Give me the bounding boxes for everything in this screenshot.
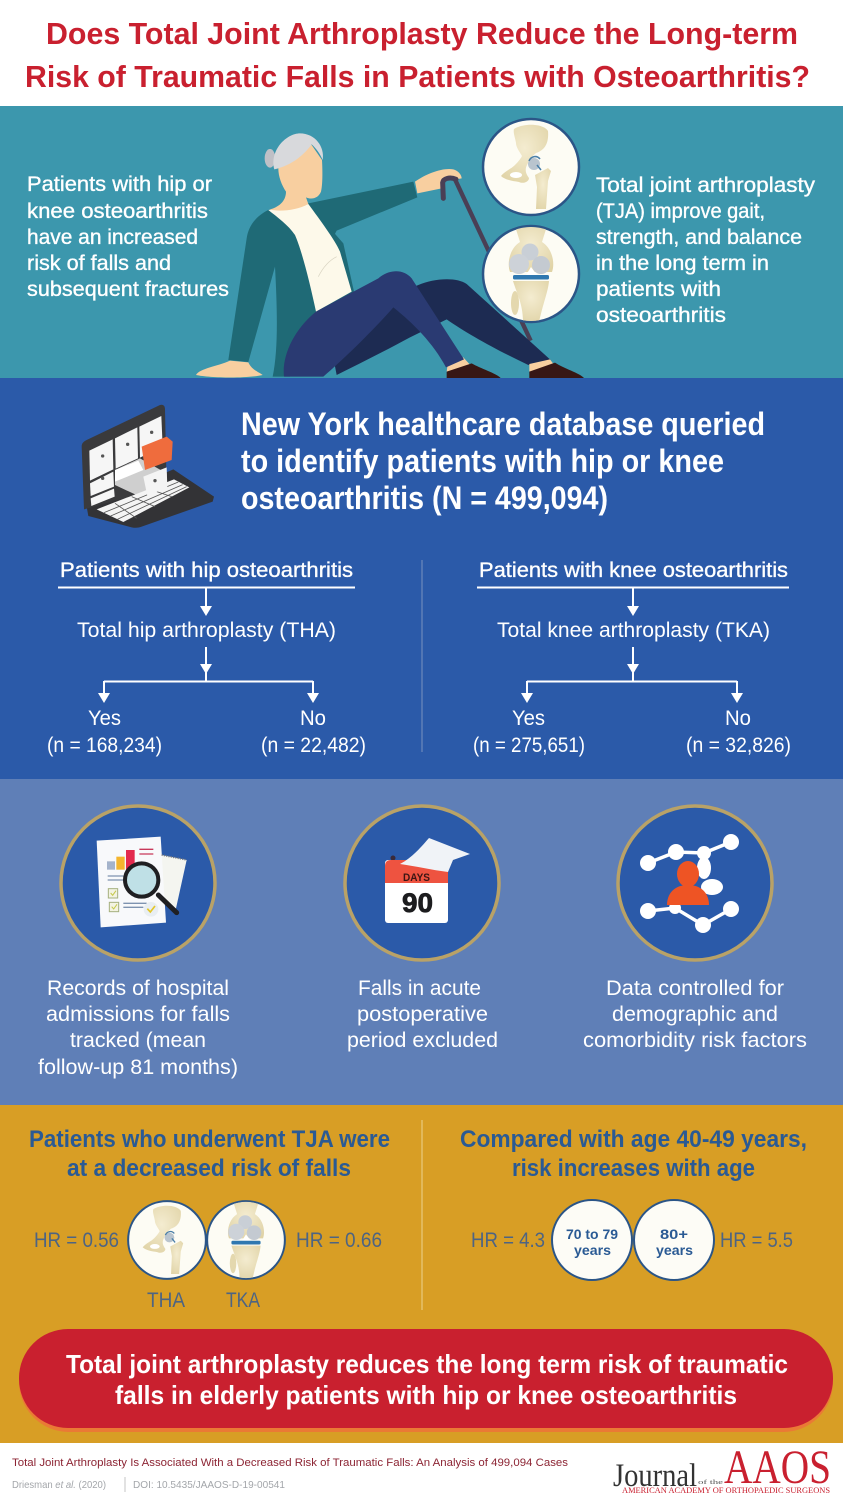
flowchart: hip osteoarthritis: Patients with hip osteoarthritis — [60, 559, 353, 582]
icon: records with magnifier — [61, 806, 215, 960]
title: Risk of Traumatic Falls in Patients with Osteoarthritis? — [25, 59, 810, 94]
flowchart: knee osteoarthritis — [473, 559, 791, 757]
stat: age 80+ hazard ratio: years — [656, 1242, 693, 1258]
text: arthroplasty benefits: (TJA) improve gait, — [596, 200, 765, 223]
text: falls excluded: Falls in acute — [358, 977, 481, 1000]
icon: patient network — [618, 806, 772, 960]
stat: TKA hazard ratio — [207, 1201, 382, 1312]
stat: age 80+ hazard ratio: HR = 5.5 — [720, 1229, 793, 1252]
flowchart: knee osteoarthritis: Patients with knee osteoarthritis — [479, 559, 788, 582]
heading: database query: osteoarthritis (N = 499,094) — [241, 480, 608, 516]
heading: risk by age — [460, 1126, 807, 1182]
heading: decreased fall risk — [29, 1126, 390, 1182]
stat: age 70 to 79 hazard ratio: years — [574, 1242, 611, 1258]
heading: risk by age: Compared with age 40-49 years, — [460, 1126, 807, 1153]
flowchart: hip osteoarthritis: Total hip arthroplasty (THA) — [77, 619, 336, 642]
flowchart: hip osteoarthritis: (n = 168,234) — [47, 734, 162, 757]
text: data controlled: demographic and — [612, 1003, 778, 1026]
text: records tracked: Records of hospital — [47, 977, 229, 1000]
text: arthroplasty benefits: in the long term in — [596, 252, 769, 275]
icon: 90 days calendar: 90 — [402, 888, 433, 918]
citation: Driesman et al. (2020) — [12, 1479, 106, 1491]
flowchart: knee osteoarthritis: No — [725, 707, 751, 730]
text: records tracked: tracked (mean — [70, 1029, 206, 1052]
text: records tracked: follow-up 81 months) — [38, 1056, 238, 1079]
divider — [421, 1120, 423, 1310]
text: arthroplasty benefits — [596, 174, 816, 327]
flowchart: knee osteoarthritis: (n = 32,826) — [686, 734, 791, 757]
heading: decreased fall risk: at a decreased risk of falls — [67, 1155, 351, 1182]
text: arthroplasty benefits: Total joint arthroplasty — [596, 174, 816, 197]
flowchart: knee osteoarthritis: Total knee arthroplasty (TKA) — [497, 619, 770, 642]
stat: THA hazard ratio: HR = 0.56 — [34, 1229, 119, 1252]
text: osteoarthritis fall risk: Patients with hip or — [27, 173, 212, 196]
stat: TKA hazard ratio: TKA — [226, 1289, 260, 1312]
callout: conclusion: falls in elderly patients with hip or knee osteoarthritis — [115, 1380, 737, 1410]
illustration: seated elderly woman with cane — [196, 133, 584, 378]
title: Does Total Joint Arthroplasty Reduce the Long-term — [46, 16, 798, 51]
text: arthroplasty benefits: osteoarthritis — [596, 304, 726, 327]
footer — [0, 1441, 843, 1500]
callout: conclusion: Total joint arthroplasty reduces the long term risk of traumatic — [66, 1349, 788, 1379]
panel: background risk and benefit — [0, 106, 843, 378]
icon: knee implant — [483, 226, 579, 322]
text: osteoarthritis fall risk: risk of falls and — [27, 252, 171, 275]
logo: Journal of the AAOS — [613, 1441, 831, 1495]
panel: results — [0, 1105, 843, 1443]
citation — [12, 1457, 569, 1492]
text: data controlled — [583, 977, 807, 1052]
stat: age 80+ hazard ratio — [634, 1200, 793, 1280]
text: arthroplasty benefits: patients with — [596, 278, 721, 301]
text: falls excluded — [347, 977, 498, 1052]
icon: hip implant — [483, 119, 579, 215]
flowchart: hip osteoarthritis: No — [300, 707, 326, 730]
stat: age 70 to 79 hazard ratio — [471, 1200, 632, 1280]
stat: age 70 to 79 hazard ratio: HR = 4.3 — [471, 1229, 545, 1252]
logo: Journal of the AAOS: of the — [698, 1479, 724, 1486]
stat: age 80+ hazard ratio: 80+ — [660, 1226, 688, 1242]
text: osteoarthritis fall risk: knee osteoarthritis — [27, 200, 208, 223]
callout: conclusion — [19, 1329, 833, 1432]
logo: Journal of the AAOS: Journal — [613, 1458, 697, 1494]
heading: database query — [241, 406, 765, 516]
flowchart: hip osteoarthritis: Yes — [88, 707, 121, 730]
logo: Journal of the AAOS: AMERICAN ACADEMY OF ORTHOPAEDIC SURGEONS — [622, 1486, 830, 1495]
stat: age 70 to 79 hazard ratio: 70 to 79 — [566, 1226, 618, 1242]
heading: database query: New York healthcare database queried — [241, 406, 765, 442]
citation: Total Joint Arthroplasty Is Associated With a Decreased Risk of Traumatic Falls: An Analysis of 499,094 Cases — [12, 1457, 569, 1469]
divider — [421, 560, 423, 752]
stat: THA hazard ratio: THA — [147, 1289, 185, 1312]
text: falls excluded: period excluded — [347, 1029, 498, 1052]
text: osteoarthritis fall risk: subsequent fractures — [27, 278, 229, 301]
heading: database query: to identify patients with hip or knee — [241, 443, 724, 479]
heading: decreased fall risk: Patients who underwent TJA were — [29, 1126, 390, 1153]
text: arthroplasty benefits: strength, and balance — [596, 226, 802, 249]
text: osteoarthritis fall risk — [27, 173, 229, 301]
text: data controlled: comorbidity risk factors — [583, 1029, 807, 1052]
flowchart: hip osteoarthritis: (n = 22,482) — [261, 734, 366, 757]
icon: laptop with file drawers — [82, 405, 214, 528]
text: osteoarthritis fall risk: have an increased — [27, 226, 198, 249]
text: records tracked — [38, 977, 238, 1079]
panel: methods — [0, 779, 843, 1105]
flowchart: knee osteoarthritis: (n = 275,651) — [473, 734, 585, 757]
stat: TKA hazard ratio: HR = 0.66 — [296, 1229, 382, 1252]
stat: THA hazard ratio — [34, 1201, 206, 1312]
icon: 90 days calendar — [345, 806, 499, 960]
flowchart: knee osteoarthritis: Yes — [512, 707, 545, 730]
heading: risk by age: risk increases with age — [512, 1155, 755, 1182]
text: data controlled: Data controlled for — [606, 977, 784, 1000]
flowchart: hip osteoarthritis — [47, 559, 366, 757]
title — [0, 0, 843, 106]
text: falls excluded: postoperative — [357, 1003, 488, 1026]
panel: study cohort — [0, 378, 843, 779]
text: records tracked: admissions for falls — [46, 1003, 230, 1026]
icon: 90 days calendar: DAYS — [403, 872, 430, 884]
citation: DOI: 10.5435/JAAOS-D-19-00541 — [133, 1479, 285, 1491]
